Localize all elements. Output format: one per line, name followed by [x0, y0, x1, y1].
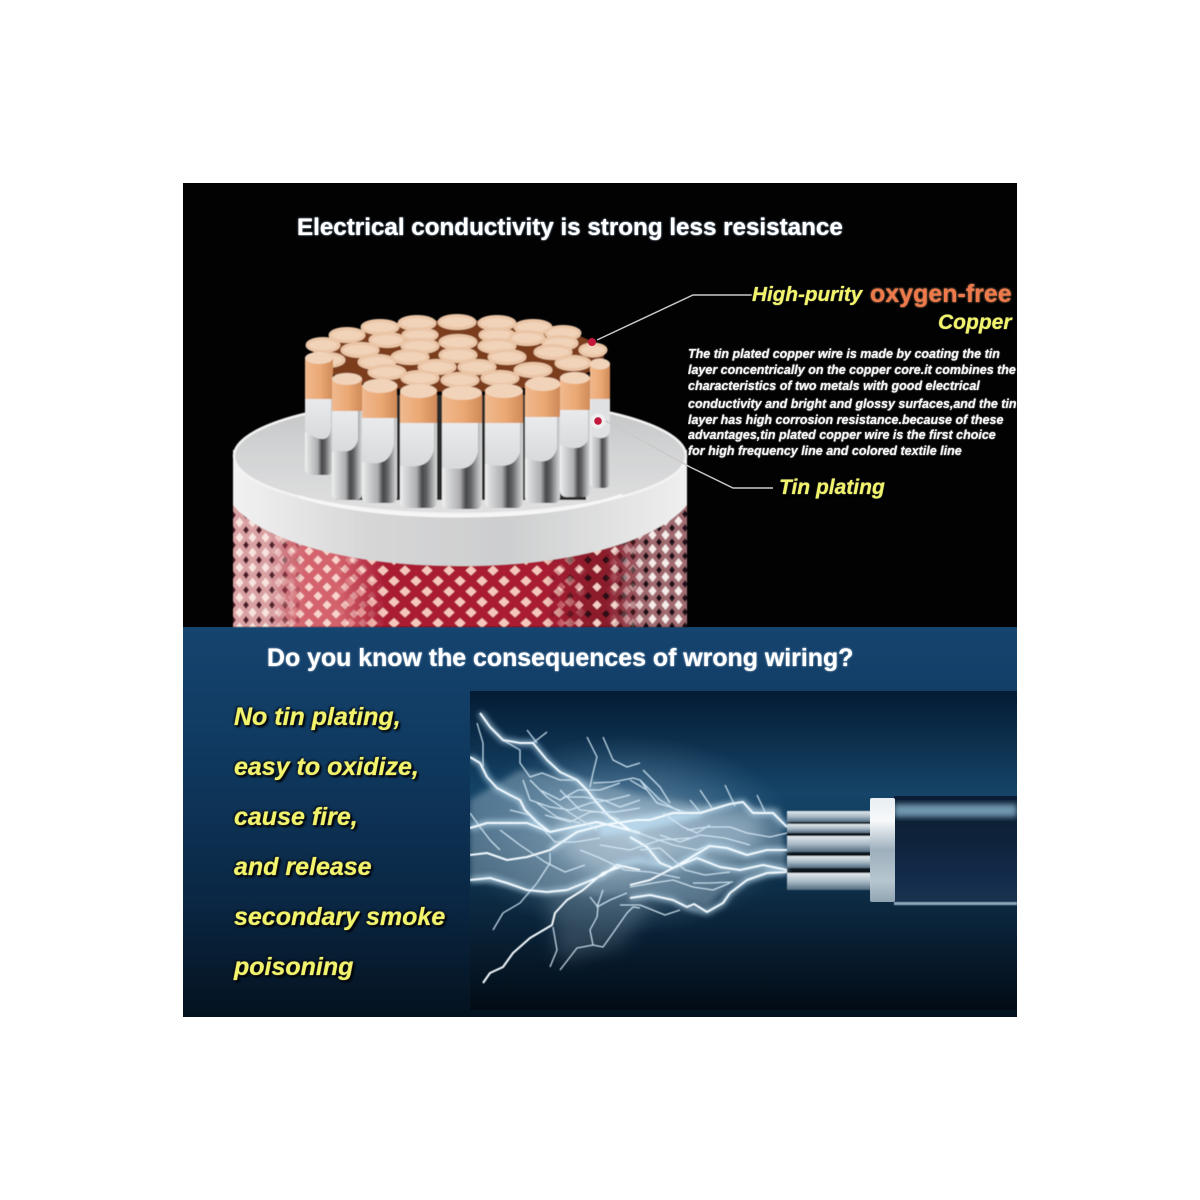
leader line: copper [597, 295, 752, 340]
illustration: tin plated copper cable [233, 316, 687, 627]
label: high-purity oxygen-free copper: Copper [938, 311, 1012, 334]
text block: wrong wiring consequences: secondary smoke [234, 903, 445, 931]
copper strand tops, back rows [307, 316, 606, 386]
text block: tin plated copper description: conductivity and bright and glossy surfaces,and the tin [688, 397, 1017, 411]
text block: tin plated copper description: advantages,tin plated copper wire is the first choice [688, 428, 996, 442]
text block: tin plated copper description: for high frequency line and colored textile line [688, 444, 962, 458]
strand: front 3 [400, 384, 437, 508]
leader line: tin plating [606, 421, 773, 488]
text block: wrong wiring consequences: No tin plating, [234, 703, 401, 731]
text block: tin plated copper description: characteristics of two metals with good electrical [688, 379, 980, 393]
strand: far left [305, 352, 333, 475]
cable mesh braid [233, 505, 687, 627]
text block: wrong wiring consequences: and release [234, 853, 372, 881]
spark haze [455, 735, 795, 960]
photo: cable with electric sparks [455, 691, 1017, 1010]
strand: front 1 [332, 373, 362, 500]
label: high-purity oxygen-free copper [750, 280, 1013, 334]
conductor bundle base [312, 320, 604, 392]
strand: front centre [442, 386, 482, 509]
cable conductor strands [787, 811, 871, 890]
marker dot: tin [590, 414, 606, 428]
label: tin plating: Tin plating [779, 476, 885, 499]
strand: front 6 [485, 384, 523, 508]
text block: tin plated copper description [688, 347, 1017, 458]
lightning glow [470, 713, 787, 912]
lightning bolts [470, 713, 787, 983]
label: high-purity oxygen-free copper: High-purity [752, 283, 862, 306]
text block: wrong wiring consequences: cause fire, [234, 803, 358, 831]
text block: wrong wiring consequences [232, 703, 448, 983]
strand: front 8 [560, 372, 590, 497]
text block: tin plated copper description: layer concentrically on the copper core.it combines the [688, 363, 1016, 377]
panel: product infographic [183, 183, 1017, 1017]
heading: conductivity: Electrical conductivity is strong less resistance [297, 214, 843, 241]
lightning branches [470, 723, 787, 970]
marker dot: copper [588, 338, 596, 346]
dark gaps behind strands [336, 395, 586, 500]
insulation top disc [234, 398, 686, 514]
text block: tin plated copper description: The tin plated copper wire is made by coating the tin [688, 347, 1000, 361]
cable jacket [894, 796, 1017, 906]
text block: tin plated copper description: layer has high corrosion resistance.because of these [688, 413, 1003, 427]
cable metal sleeve [870, 798, 895, 902]
strand: front 2 [362, 379, 398, 503]
label: high-purity oxygen-free copper: oxygen-free [870, 280, 1012, 308]
text block: wrong wiring consequences: poisoning [234, 953, 353, 981]
strand: front 7 [525, 377, 560, 503]
text block: wrong wiring consequences: easy to oxidize, [234, 753, 419, 781]
heading: consequences: Do you know the consequences of wrong wiring? [267, 644, 853, 672]
white insulation band [233, 450, 687, 566]
disc front rim highlight [300, 495, 622, 516]
background: lower blue section [183, 627, 1017, 1017]
strand: far right [590, 358, 610, 488]
